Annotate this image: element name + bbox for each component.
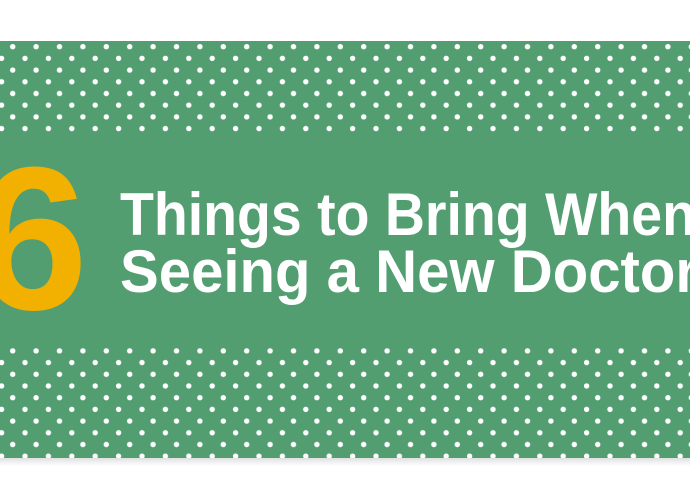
title [120, 181, 690, 305]
dot pattern top [0, 41, 690, 133]
shadow under band [0, 458, 690, 466]
dot pattern bottom [0, 346, 690, 458]
